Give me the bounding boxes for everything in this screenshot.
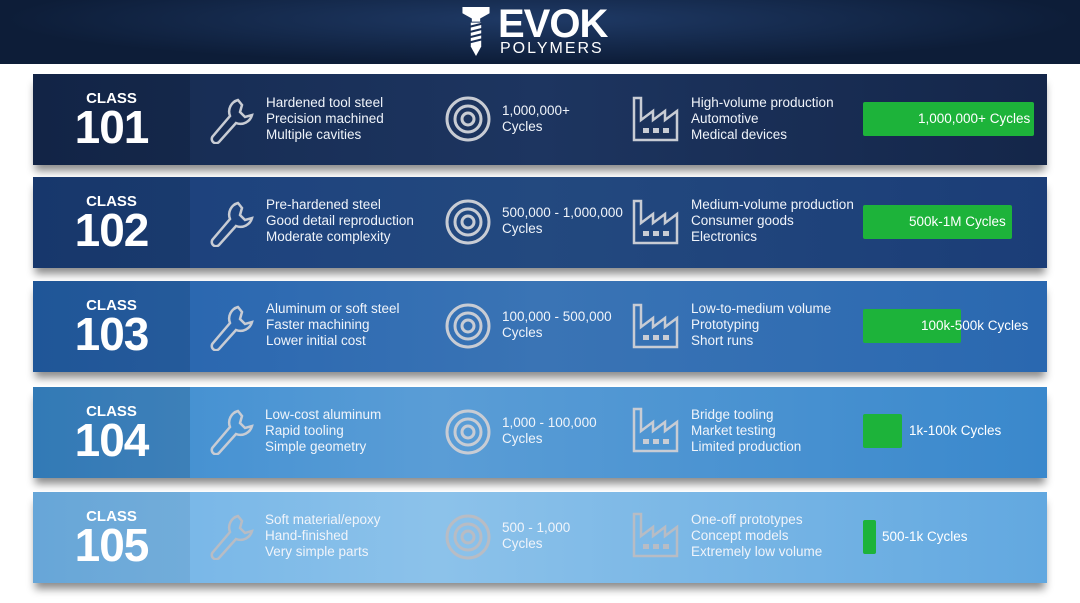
row: class 104: Rapid tooling <box>265 423 344 438</box>
row: class 104: 1,000 - 100,000 <box>502 415 597 430</box>
row: class 102: Consumer goods <box>691 213 794 228</box>
row: class 104 <box>33 387 1047 478</box>
row: class 105: 105 <box>75 519 148 571</box>
icon: wrench <box>210 202 254 247</box>
row: class 103: 103 <box>75 308 148 360</box>
row: class 105: 500-1k Cycles <box>882 529 968 544</box>
row: class 105: Concept models <box>691 528 789 543</box>
row: class 104: Limited production <box>691 439 801 454</box>
icon: factory <box>632 512 678 558</box>
row: class 102 <box>33 177 1047 268</box>
row: class 104: Market testing <box>691 423 776 438</box>
row: class 105: Extremely low volume <box>691 544 822 559</box>
row: class 102: Cycles <box>502 221 543 236</box>
row: class 103: Lower initial cost <box>266 333 366 348</box>
row: class 102: Good detail reproduction <box>266 213 414 228</box>
header <box>0 0 1080 64</box>
logo: POLYMERS <box>500 40 604 57</box>
row: class 105: CLASS <box>86 508 137 525</box>
row: class 101 <box>33 74 1047 165</box>
icon: wrench <box>210 514 254 560</box>
icon: wrench <box>210 98 254 144</box>
icon: factory <box>632 408 678 452</box>
row: class 103: Faster machining <box>266 317 370 332</box>
row: class 104: Cycles <box>502 431 543 446</box>
row: class 101: Medical devices <box>691 127 787 142</box>
icon: factory <box>632 200 678 244</box>
row: class 102: 102 <box>75 204 148 256</box>
icon: factory <box>632 96 678 142</box>
row: class 105: One-off prototypes <box>691 512 803 527</box>
row: class 102: Moderate complexity <box>266 229 391 244</box>
row: class 101: Automotive <box>691 111 759 126</box>
icon: screw <box>462 7 490 56</box>
bar: 100k-500k <box>863 309 961 343</box>
row: class 104: Simple geometry <box>265 439 366 454</box>
row: class 104: Bridge tooling <box>691 407 774 422</box>
icon: target <box>446 514 490 560</box>
row: class 105: Hand-finished <box>265 528 348 543</box>
row: class 103: Short runs <box>691 333 753 348</box>
row: class 102: CLASS <box>86 193 137 210</box>
row: class 105: Cycles <box>502 536 543 551</box>
row: class 104: CLASS <box>86 403 137 420</box>
row: class 105 <box>33 492 1047 583</box>
row: class 101: Hardened tool steel <box>266 95 383 110</box>
bar: 1k-100k <box>863 414 902 448</box>
bar: 500-1k <box>863 520 876 554</box>
row: class 104: Low-cost aluminum <box>265 407 381 422</box>
bar: 1,000,000+ <box>863 102 1034 136</box>
logo <box>462 2 608 57</box>
row: class 101: CLASS <box>86 90 137 107</box>
row: class 104: 104 <box>75 414 148 466</box>
logo: EVOK <box>498 2 607 46</box>
row: class 105: Soft material/epoxy <box>265 512 381 527</box>
row: class 105: 500 - 1,000 <box>502 520 570 535</box>
icon: wrench <box>210 410 254 455</box>
row: class 101: Cycles <box>502 119 543 134</box>
row: class 103: Aluminum or soft steel <box>266 301 400 316</box>
row: class 103 <box>33 281 1047 372</box>
row: class 101: 1,000,000+ <box>502 103 570 118</box>
icon: factory <box>632 304 678 348</box>
row: class 101: 101 <box>75 101 148 153</box>
row: class 105: Very simple parts <box>265 544 369 559</box>
row: class 102: Electronics <box>691 229 757 244</box>
row: class 104: 1k-100k Cycles <box>909 423 1001 438</box>
row: class 103: 100k-500k Cycles <box>921 318 1028 333</box>
row: class 102: Pre-hardened steel <box>266 197 381 212</box>
icon: target <box>446 96 490 142</box>
row: class 101: Precision machined <box>266 111 384 126</box>
row: class 101: 1,000,000+ Cycles <box>918 111 1030 126</box>
bar: 500k-1M <box>863 205 1012 239</box>
row: class 103: 100,000 - 500,000 <box>502 309 612 324</box>
row: class 101: High-volume production <box>691 95 834 110</box>
row: class 102: 500,000 - 1,000,000 <box>502 205 623 220</box>
icon: target <box>446 200 490 244</box>
row: class 103: CLASS <box>86 297 137 314</box>
icon: wrench <box>210 306 254 351</box>
row: class 103: Cycles <box>502 325 543 340</box>
row: class 103: Prototyping <box>691 317 759 332</box>
row: class 101: Multiple cavities <box>266 127 361 142</box>
icon: target <box>446 304 490 348</box>
row: class 103: Low-to-medium volume <box>691 301 831 316</box>
icon: target <box>446 410 490 454</box>
row: class 102: Medium-volume production <box>691 197 854 212</box>
row: class 102: 500k-1M Cycles <box>909 214 1006 229</box>
